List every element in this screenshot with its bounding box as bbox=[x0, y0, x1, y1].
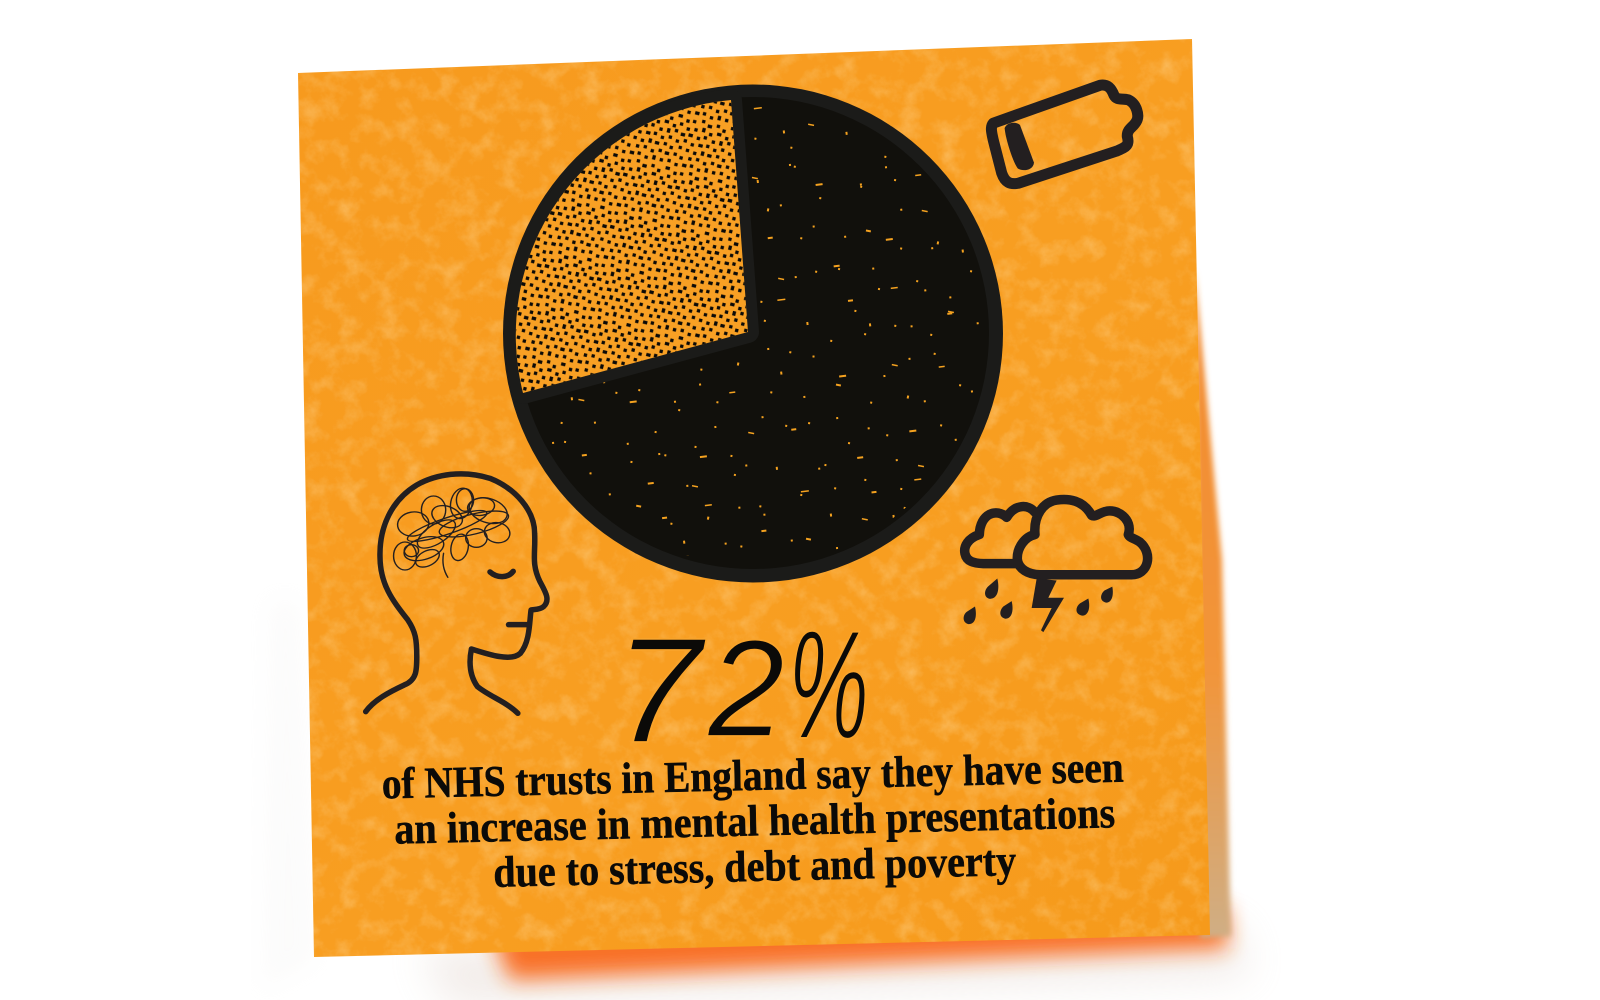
description text: due to stress, debt and poverty bbox=[493, 836, 1017, 897]
small cloud bbox=[965, 507, 1035, 564]
note shadow bbox=[262, 270, 1250, 1000]
mouth bbox=[509, 622, 527, 627]
description text: an increase in mental health presentations bbox=[394, 788, 1116, 854]
closed eye bbox=[490, 571, 513, 577]
pie 28 percent stippled segment bbox=[516, 100, 748, 393]
icon: head with tangled thoughts bbox=[366, 474, 547, 713]
icon: storm clouds bbox=[964, 499, 1148, 632]
pie dark segment flecks bbox=[521, 101, 985, 565]
big number: 72%: 2 bbox=[707, 612, 785, 766]
icon: battery bbox=[991, 85, 1138, 184]
rain drops bbox=[964, 579, 1113, 624]
tangled scribble bbox=[394, 486, 512, 577]
big number: 72% bbox=[614, 598, 869, 774]
lightning bolt bbox=[1032, 579, 1064, 632]
description text bbox=[381, 743, 1124, 897]
wedge border bbox=[516, 100, 748, 393]
description text: of NHS trusts in England say they have seen bbox=[381, 743, 1124, 808]
big cloud bbox=[1017, 499, 1148, 575]
pie 72 percent dark segment bbox=[517, 97, 989, 569]
big number: 72%: % bbox=[788, 598, 869, 771]
big number: 72%: 7 bbox=[614, 606, 707, 774]
pie dark segment extra flecks bbox=[521, 101, 985, 565]
pie outer ring bbox=[503, 84, 1003, 582]
pie chart bbox=[503, 84, 1003, 582]
head outline bbox=[366, 474, 547, 713]
battery charge bar bbox=[1005, 123, 1034, 170]
sticky note paper bbox=[290, 30, 1220, 965]
